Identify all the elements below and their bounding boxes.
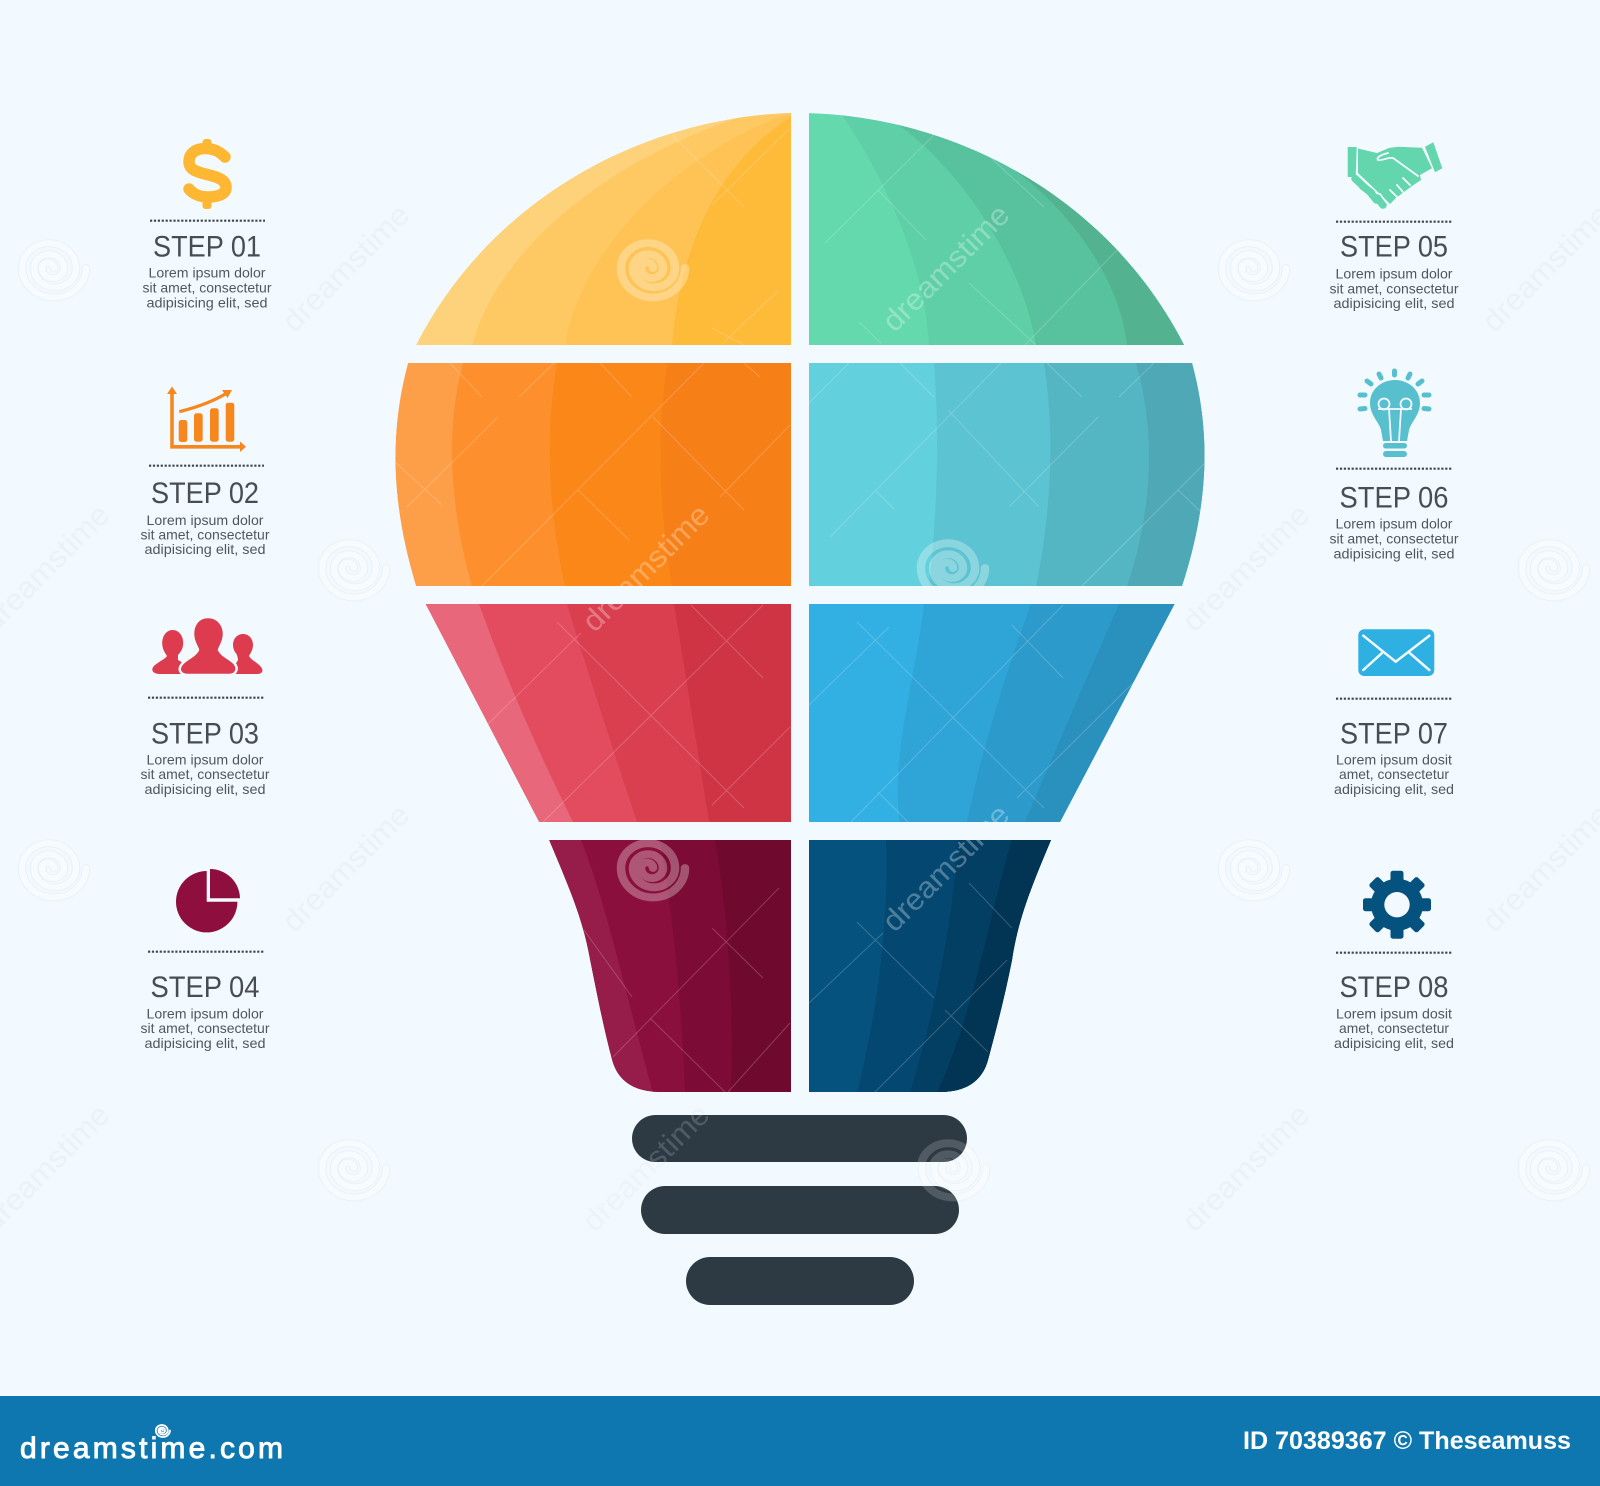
step 05 block: STEP 05	[1340, 231, 1448, 264]
step 01 block: STEP 01	[153, 231, 261, 264]
background watermark: dreamstime	[576, 1098, 716, 1238]
step 06 block: Lorem ipsum dolor	[1336, 516, 1453, 532]
step 07 block: adipisicing elit, sed	[1334, 781, 1454, 797]
step 02 block: adipisicing elit, sed	[144, 541, 266, 557]
step 04 block: STEP 04	[150, 971, 260, 1004]
background watermark: dreamstime	[276, 198, 416, 338]
icon: pie chart	[176, 869, 240, 932]
step 08 block: Lorem ipsum dosit	[1336, 1005, 1452, 1021]
footer band	[0, 1396, 1600, 1486]
icon: handshake	[1348, 142, 1442, 205]
step 08 block: amet, consectetur	[1339, 1020, 1449, 1036]
background watermark: dreamstime	[276, 798, 416, 938]
step 08 block: adipisicing elit, sed	[1334, 1035, 1454, 1051]
bulb screw base	[632, 1115, 967, 1305]
step 06 block: sit amet, consectetur	[1330, 530, 1459, 546]
panel: bulb third row right blue	[809, 604, 1200, 822]
panel: bulb fourth row left maroon	[549, 840, 800, 1093]
step 03 block: adipisicing elit, sed	[144, 781, 266, 797]
step 04 block: adipisicing elit, sed	[144, 1035, 266, 1051]
step 02 block: sit amet, consectetur	[140, 526, 270, 542]
background watermark: dreamstime	[1176, 1098, 1316, 1238]
icon: growth bar chart	[167, 386, 246, 452]
step 06 block: adipisicing elit, sed	[1334, 545, 1454, 561]
step 08 block: STEP 08	[1340, 971, 1448, 1004]
step 04 block	[140, 869, 270, 1051]
background watermark	[0, 198, 1600, 1238]
panel: bulb fourth row right navy	[809, 840, 1060, 1093]
icon: group of people	[152, 617, 262, 675]
watermark spirals and words over bulb: dreamstime	[576, 498, 716, 638]
icon: envelope	[1358, 629, 1434, 676]
watermark spirals and words over bulb: dreamstime	[876, 798, 1016, 938]
step 03 block: sit amet, consectetur	[140, 766, 270, 782]
watermark spirals and words over bulb: dreamstime	[876, 198, 1016, 338]
step 02 block: Lorem ipsum dolor	[146, 512, 264, 528]
icon: gear	[1363, 871, 1431, 939]
step 06 block	[1330, 371, 1459, 561]
panel: bulb second row left orange	[395, 363, 800, 587]
watermark spirals and words over bulb	[576, 198, 1016, 938]
step 05 block	[1330, 142, 1459, 311]
step 01 block: Lorem ipsum dolor	[148, 265, 266, 281]
step 02 block: STEP 02	[151, 477, 259, 510]
step 07 block	[1334, 629, 1454, 797]
background watermark: dreamstime	[1176, 498, 1316, 638]
panel: bulb top left yellow	[416, 112, 800, 346]
step 04 block: sit amet, consectetur	[140, 1020, 270, 1036]
watermark over bulb base: dreamstime	[576, 1098, 716, 1238]
step 07 block: Lorem ipsum dosit	[1336, 751, 1452, 767]
panel: bulb second row right teal	[809, 363, 1215, 587]
step 07 block: amet, consectetur	[1339, 766, 1449, 782]
watermark over bulb base	[576, 1098, 985, 1238]
footer image id and credit: ID 70389367 © Theseamuss	[1243, 1427, 1571, 1455]
step 01 block	[142, 139, 272, 310]
step 03 block	[140, 617, 270, 797]
panel: bulb top right green	[809, 112, 1200, 346]
step 02 block	[140, 386, 270, 557]
step 03 block: STEP 03	[151, 717, 259, 750]
footer logo: dreamstime.com	[20, 1432, 283, 1465]
step 07 block: STEP 07	[1340, 717, 1448, 750]
panel: bulb third row left red	[426, 604, 800, 822]
step 05 block: sit amet, consectetur	[1330, 280, 1459, 296]
step 03 block: Lorem ipsum dolor	[146, 751, 264, 767]
watermark lines over bulb	[396, 128, 1205, 1092]
step 08 block	[1334, 871, 1454, 1051]
icon: dollar sign	[189, 139, 226, 209]
step 04 block: Lorem ipsum dolor	[146, 1005, 264, 1021]
step 06 block: STEP 06	[1340, 481, 1448, 514]
step 01 block: adipisicing elit, sed	[146, 294, 268, 310]
step 05 block: Lorem ipsum dolor	[1336, 265, 1453, 281]
step 01 block: sit amet, consectetur	[142, 279, 272, 295]
step 05 block: adipisicing elit, sed	[1334, 295, 1454, 311]
icon: light bulb with rays	[1360, 371, 1429, 457]
